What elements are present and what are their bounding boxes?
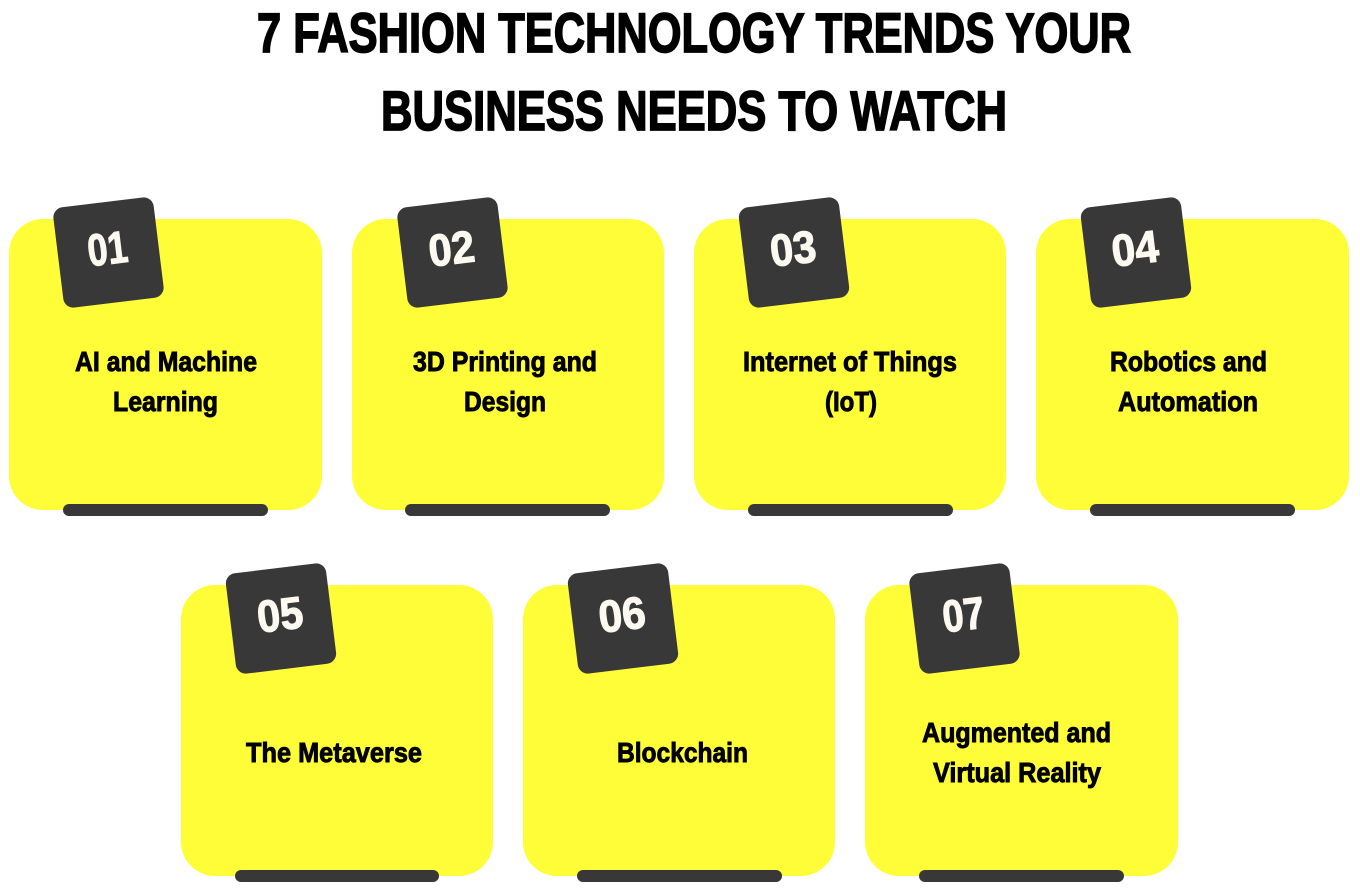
badge: 07: 07	[940, 587, 987, 642]
label: Internet of Things (IoT)	[743, 346, 957, 417]
title	[257, 1, 1131, 142]
badge: 06: 06	[596, 586, 648, 643]
label: Robotics and Automation: Robotics and	[1110, 346, 1267, 377]
badge: 01	[52, 196, 165, 309]
title: 7 FASHION TECHNOLOGY TRENDS YOUR	[257, 1, 1131, 64]
label: 3D Printing and Design: Design	[464, 386, 546, 417]
label: 3D Printing and Design: 3D Printing and	[413, 346, 597, 377]
label: Augmented and Virtual Reality: Augmented and	[922, 717, 1111, 748]
badge: 02	[396, 196, 509, 309]
label: AI and Machine Learning	[75, 346, 257, 417]
label: Blockchain: Blockchain	[617, 737, 748, 768]
label: The Metaverse: The Metaverse	[246, 737, 422, 768]
label: Robotics and Automation: Automation	[1118, 386, 1258, 417]
panel: 02 3D Printing and Design	[352, 196, 664, 516]
badge: 07	[908, 562, 1021, 675]
badge: 02: 02	[426, 220, 477, 277]
panel: 01 AI and Machine Learning	[9, 196, 322, 516]
badge: 05	[225, 562, 337, 675]
panel: 05 The Metaverse	[181, 562, 493, 882]
panel: 03 Internet of Things	[694, 196, 1006, 516]
panel: 06 Blockchain	[523, 562, 835, 882]
label: Internet of Things (IoT): Internet of Things	[743, 346, 957, 377]
label: AI and Machine Learning: AI and Machine	[75, 346, 257, 377]
panel: 04 Robotics and Automation	[1036, 196, 1349, 516]
label: AI and Machine Learning: Learning	[113, 386, 218, 417]
label: Augmented and Virtual Reality	[922, 717, 1111, 788]
badge: 04	[1080, 196, 1192, 309]
badge: 06	[567, 562, 679, 675]
badge: 03: 03	[767, 220, 819, 277]
badge: 01: 01	[85, 221, 130, 276]
badge: 03	[738, 196, 850, 309]
title: BUSINESS NEEDS TO WATCH	[381, 79, 1007, 142]
badge: 05: 05	[254, 586, 306, 643]
label: Robotics and Automation	[1110, 346, 1267, 417]
label: Internet of Things (IoT): (IoT)	[825, 386, 877, 417]
panel: 07 Augmented and Virtual Reality	[865, 562, 1178, 882]
label: Augmented and Virtual Reality: Virtual Reality	[933, 757, 1101, 788]
label: 3D Printing and Design	[413, 346, 597, 417]
badge: 04: 04	[1109, 220, 1161, 277]
